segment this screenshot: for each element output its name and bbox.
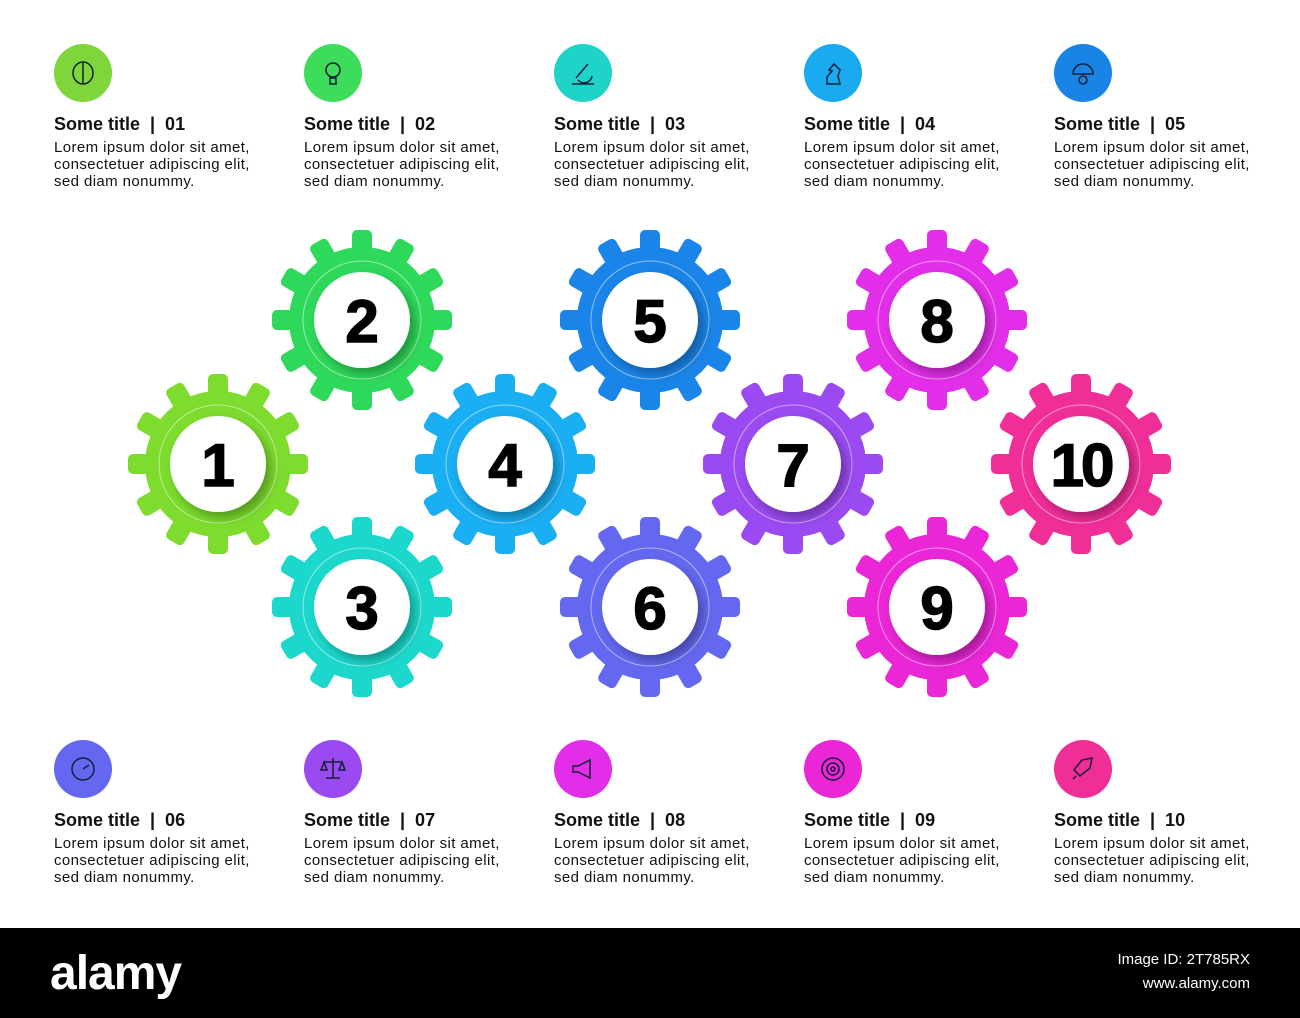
item 07: Lorem ipsum dolor sit amet, (304, 835, 500, 852)
item 03 (554, 44, 750, 190)
gear 7: 7 (776, 432, 810, 499)
gear 10 (958, 374, 1171, 587)
item 07: consectetuer adipiscing elit, (304, 852, 500, 869)
item 08: consectetuer adipiscing elit, (554, 852, 750, 869)
item 04: Some title | 04 (804, 114, 935, 134)
item 02: sed diam nonummy. (304, 173, 445, 190)
item 05: Lorem ipsum dolor sit amet, (1054, 139, 1250, 156)
item 06: consectetuer adipiscing elit, (54, 852, 250, 869)
gear 1: 1 (201, 432, 235, 499)
item 05 (1054, 44, 1250, 190)
item 04: sed diam nonummy. (804, 173, 945, 190)
item 10: Lorem ipsum dolor sit amet, (1054, 835, 1250, 852)
icon: microscope (554, 44, 612, 102)
gear 6: 6 (633, 575, 667, 642)
item 04 (804, 44, 1000, 190)
item 08: Some title | 08 (554, 810, 685, 830)
item 06 (54, 740, 250, 886)
icon: clock (54, 740, 112, 798)
item 09: consectetuer adipiscing elit, (804, 852, 1000, 869)
gear 2: 2 (345, 288, 379, 355)
item 04: consectetuer adipiscing elit, (804, 156, 1000, 173)
icon: rocket (1054, 740, 1112, 798)
item 01: Lorem ipsum dolor sit amet, (54, 139, 250, 156)
icon: bulb (304, 44, 362, 102)
gear 10: 10 (1051, 432, 1112, 499)
item 03: Lorem ipsum dolor sit amet, (554, 139, 750, 156)
item 01: consectetuer adipiscing elit, (54, 156, 250, 173)
gear 4 (382, 374, 595, 587)
item 03: Some title | 03 (554, 114, 685, 134)
item 08: Lorem ipsum dolor sit amet, (554, 835, 750, 852)
icon: target (804, 740, 862, 798)
gear 1 (95, 374, 308, 587)
item 02 (304, 44, 500, 190)
gear 6 (527, 517, 740, 730)
watermark bar: www.alamy.com (1143, 975, 1250, 992)
item 08: sed diam nonummy. (554, 869, 695, 886)
gear 8 (814, 230, 1027, 443)
gear 7 (670, 374, 883, 587)
item 10: consectetuer adipiscing elit, (1054, 852, 1250, 869)
item 03: consectetuer adipiscing elit, (554, 156, 750, 173)
gear 9: 9 (920, 575, 954, 642)
watermark bar: Image ID: 2T785RX (1117, 951, 1250, 968)
item 02: consectetuer adipiscing elit, (304, 156, 500, 173)
gear 8: 8 (920, 288, 954, 355)
gear 5 (527, 230, 740, 443)
gear 3: 3 (345, 575, 379, 642)
item 07: Some title | 07 (304, 810, 435, 830)
item 07: sed diam nonummy. (304, 869, 445, 886)
item 02: Lorem ipsum dolor sit amet, (304, 139, 500, 156)
item 06: Lorem ipsum dolor sit amet, (54, 835, 250, 852)
icon: chess knight (804, 44, 862, 102)
item 04: Lorem ipsum dolor sit amet, (804, 139, 1000, 156)
gear 9 (814, 517, 1027, 730)
item 10 (1054, 740, 1250, 886)
watermark bar (0, 928, 1300, 1018)
gear 2 (239, 230, 452, 443)
item 06: sed diam nonummy. (54, 869, 195, 886)
item 01 (54, 44, 250, 190)
item 09 (804, 740, 1000, 886)
gear 4: 4 (488, 432, 522, 499)
item 05: Some title | 05 (1054, 114, 1185, 134)
icon: megaphone (554, 740, 612, 798)
gear 5: 5 (633, 288, 667, 355)
gear 3 (239, 517, 452, 730)
item 09: sed diam nonummy. (804, 869, 945, 886)
item 09: Some title | 09 (804, 810, 935, 830)
item 10: Some title | 10 (1054, 810, 1185, 830)
watermark bar: alamy (50, 947, 181, 1000)
item 10: sed diam nonummy. (1054, 869, 1195, 886)
item 07 (304, 740, 500, 886)
item 05: consectetuer adipiscing elit, (1054, 156, 1250, 173)
icon: scales (304, 740, 362, 798)
item 09: Lorem ipsum dolor sit amet, (804, 835, 1000, 852)
item 06: Some title | 06 (54, 810, 185, 830)
item 03: sed diam nonummy. (554, 173, 695, 190)
item 01: sed diam nonummy. (54, 173, 195, 190)
item 01: Some title | 01 (54, 114, 185, 134)
item 02: Some title | 02 (304, 114, 435, 134)
icon: helmet gear (1054, 44, 1112, 102)
item 08 (554, 740, 750, 886)
item 05: sed diam nonummy. (1054, 173, 1195, 190)
icon: brain (54, 44, 112, 102)
